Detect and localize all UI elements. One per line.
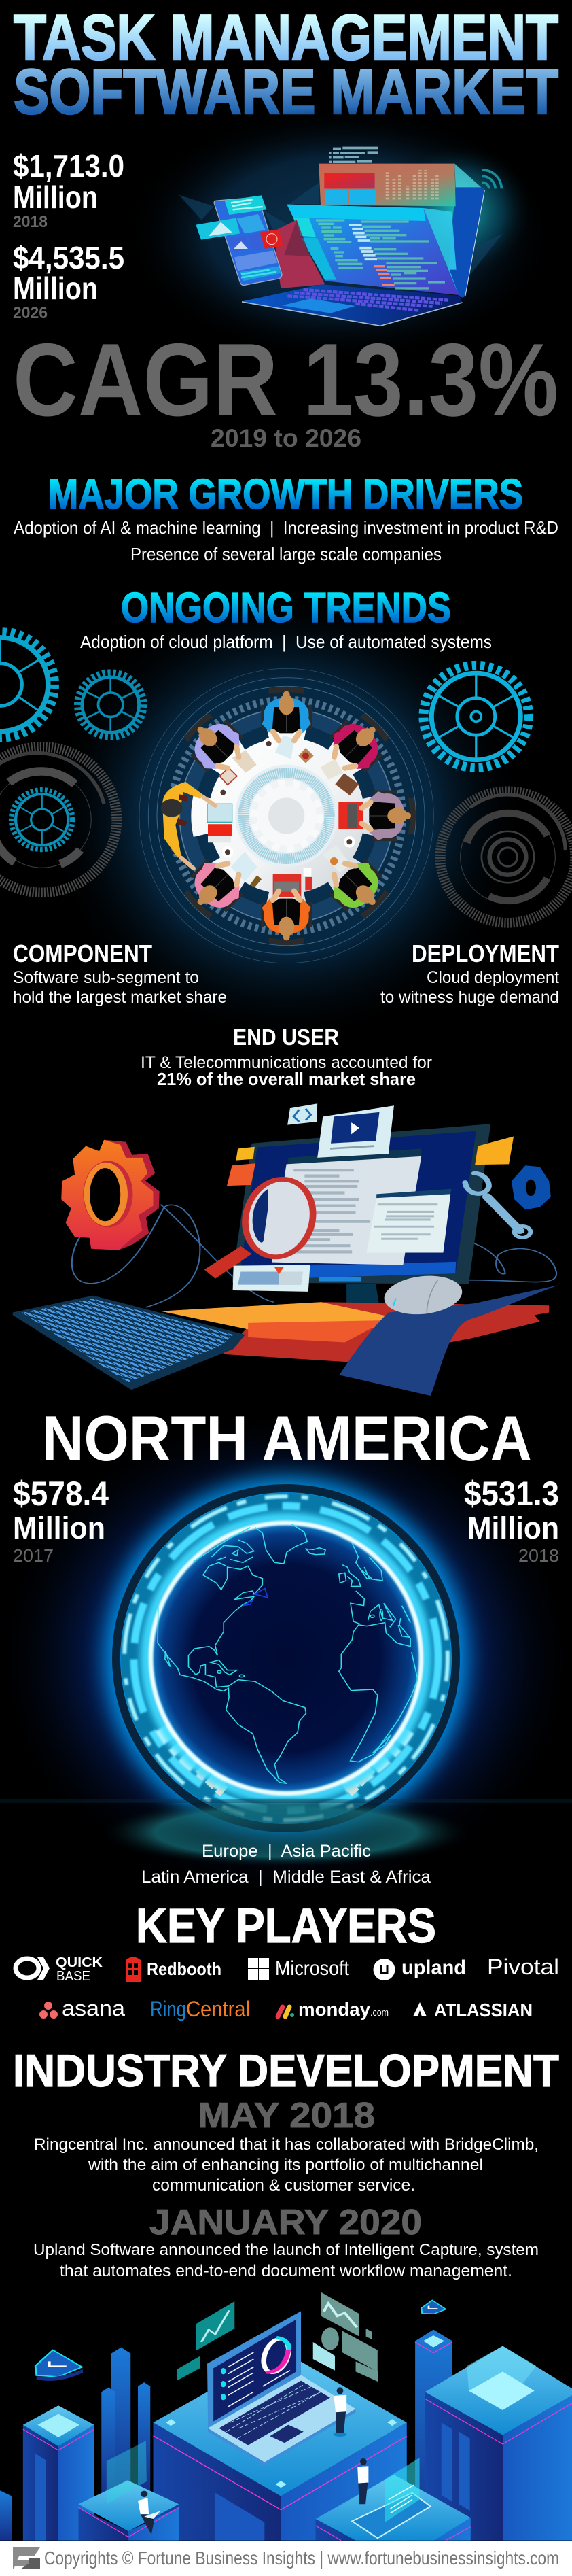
icon: code tag: [287, 1103, 317, 1125]
stat: north america 2018: [464, 1475, 559, 1566]
central rings: [139, 668, 433, 963]
low left block with seated person: [78, 2441, 179, 2541]
icon: left tech circle: [0, 746, 117, 893]
icon: wrench: [465, 1173, 531, 1237]
logo: upland: [374, 1957, 466, 1980]
illustration: monitor, gear, keyboard, desk: [13, 1103, 558, 1396]
monitor: [232, 1124, 490, 1311]
slider card: [233, 1265, 310, 1292]
illustration: round table meeting: [139, 668, 433, 963]
development: january 2020: JANUARY 2020: [149, 2203, 422, 2242]
title: [14, 1, 558, 127]
text block: deployment: Cloud deployment: [427, 968, 559, 987]
mouse: [379, 1271, 467, 1319]
video card: [317, 1105, 394, 1158]
icon: shields: [35, 2300, 446, 2381]
other regions: [141, 1842, 431, 1887]
stat: north america 2018: Million: [467, 1511, 559, 1545]
development: may 2018: MAY 2018: [198, 2096, 375, 2135]
logo: quick base: [16, 1955, 103, 1984]
logo: redbooth: Redbooth: [147, 1959, 221, 1979]
text block: end user: 21% of the overall market share: [157, 1069, 416, 1089]
keyboard: [13, 1296, 245, 1390]
development: january 2020: that automates end-to-end document workflow management.: [60, 2262, 512, 2280]
logo: atlassian: ATLASSIAN: [434, 1999, 533, 2021]
icon: orange gear: [61, 1140, 160, 1250]
panel: major growth drivers: Presence of several large scale companies: [130, 544, 442, 564]
north america heading: NORTH AMERICA: [42, 1403, 532, 1474]
colored tags: [227, 1136, 514, 1186]
people around the table: [177, 687, 416, 945]
text block: component: COMPONENT: [13, 940, 152, 967]
standing person on phone block: [357, 2458, 368, 2504]
logo: microsoft: Microsoft: [275, 1957, 350, 1980]
stat: north america 2017: Million: [13, 1511, 105, 1545]
low right block with phone: [316, 2458, 471, 2541]
market value stats: 2026: [13, 304, 48, 322]
person in yellow: [161, 782, 215, 868]
other regions: Europe | Asia Pacific: [202, 1842, 371, 1861]
development: may 2018: Ringcentral Inc. announced that it has collaborated with BridgeClimb,: [34, 2135, 539, 2154]
stat: north america 2017: 2017: [13, 1545, 54, 1566]
table items: [207, 736, 363, 897]
key players heading: KEY PLAYERS: [136, 1900, 436, 1953]
development: january 2020: Upland Software announced the launch of Intelligent Capture, system: [33, 2241, 539, 2259]
desk: [160, 1302, 549, 1362]
logo: quick base: BASE: [56, 1969, 90, 1984]
center tower: [154, 2350, 407, 2541]
text block: end user: [141, 1025, 432, 1089]
back towers and pillars: [0, 2330, 452, 2541]
development: may 2018: with the aim of enhancing its portfolio of multichannel: [88, 2156, 483, 2174]
illustration: glowing globe: [0, 1407, 572, 1910]
document windows: [272, 1148, 452, 1265]
panel: ongoing trends: Adoption of cloud platform | Use of automated systems: [80, 632, 492, 652]
development: january 2020: [33, 2203, 539, 2280]
market value stats: [13, 148, 124, 322]
logo: monday.com: .com: [370, 2007, 389, 2019]
illustration: isometric laptop city: [0, 2292, 572, 2541]
market value stats: $4,535.5: [13, 240, 124, 275]
icon: small gear: [77, 672, 144, 737]
logo: asana: [39, 1996, 125, 2021]
CAGR figure: 2019 to 2026: [211, 424, 361, 452]
data panels: [177, 2292, 378, 2382]
stat: north america 2017: [13, 1475, 109, 1566]
text block: deployment: [380, 940, 559, 1007]
market value stats: Million: [13, 271, 98, 306]
text block: deployment: to witness huge demand: [380, 988, 559, 1007]
stat: north america 2018: 2018: [518, 1545, 559, 1566]
world map outlines: [158, 1524, 418, 1783]
panel: ongoing trends: [80, 585, 492, 652]
logo: pivotal: Pivotal: [487, 1955, 559, 1979]
logo: quick base: QUICK: [56, 1955, 103, 1970]
right tower: [425, 2346, 572, 2541]
logo: monday.com: monday: [298, 1999, 370, 2020]
logo: ringcentral: Ring: [150, 1997, 186, 2021]
logo: microsoft: [248, 1957, 350, 1980]
icon: blue gear: [512, 1165, 551, 1209]
market value stats: $1,713.0: [13, 148, 124, 184]
development: may 2018: [34, 2096, 539, 2195]
round gear table: [200, 729, 372, 902]
illustration: gears: [0, 589, 572, 1044]
panel: major growth drivers: [14, 471, 558, 564]
panel: ongoing trends: ONGOING TRENDS: [121, 585, 451, 632]
icon: right gear: [423, 666, 529, 768]
logo: redbooth: [126, 1957, 221, 1982]
text block: end user: END USER: [233, 1025, 339, 1050]
cables: [72, 1202, 556, 1307]
text block: component: [13, 940, 227, 1007]
icon: magnifying glass: [204, 1177, 318, 1279]
logo: ringcentral: [150, 1997, 250, 2021]
logo: monday.com: [278, 1999, 389, 2020]
standing person on laptop: [334, 2387, 346, 2437]
icon: right tech circle: [440, 791, 572, 923]
icon: large cut-off gear: [0, 631, 55, 738]
text block: component: hold the largest market share: [13, 988, 227, 1007]
laptop: [207, 2311, 356, 2466]
mouse pad: [339, 1285, 558, 1396]
logo: asana: asana: [62, 1996, 125, 2021]
logo: fortune business insights: [13, 2547, 40, 2569]
text block: component: Software sub-segment to: [13, 968, 199, 987]
text block: end user: IT & Telecommunications accounted for: [141, 1053, 432, 1072]
stat: north america 2018: $531.3: [464, 1475, 559, 1513]
other regions: Latin America | Middle East & Africa: [141, 1868, 431, 1887]
left tower: [23, 2405, 94, 2541]
stat: north america 2017: $578.4: [13, 1475, 109, 1513]
logo: upland: upland: [401, 1957, 466, 1979]
logo: ringcentral: Central: [186, 1997, 250, 2021]
market value stats: 2018: [13, 213, 48, 231]
market value stats: Million: [13, 179, 98, 215]
development: may 2018: communication & customer service.: [152, 2176, 415, 2195]
illustration: laptop and phone: [124, 107, 555, 360]
footer: [0, 2541, 572, 2576]
